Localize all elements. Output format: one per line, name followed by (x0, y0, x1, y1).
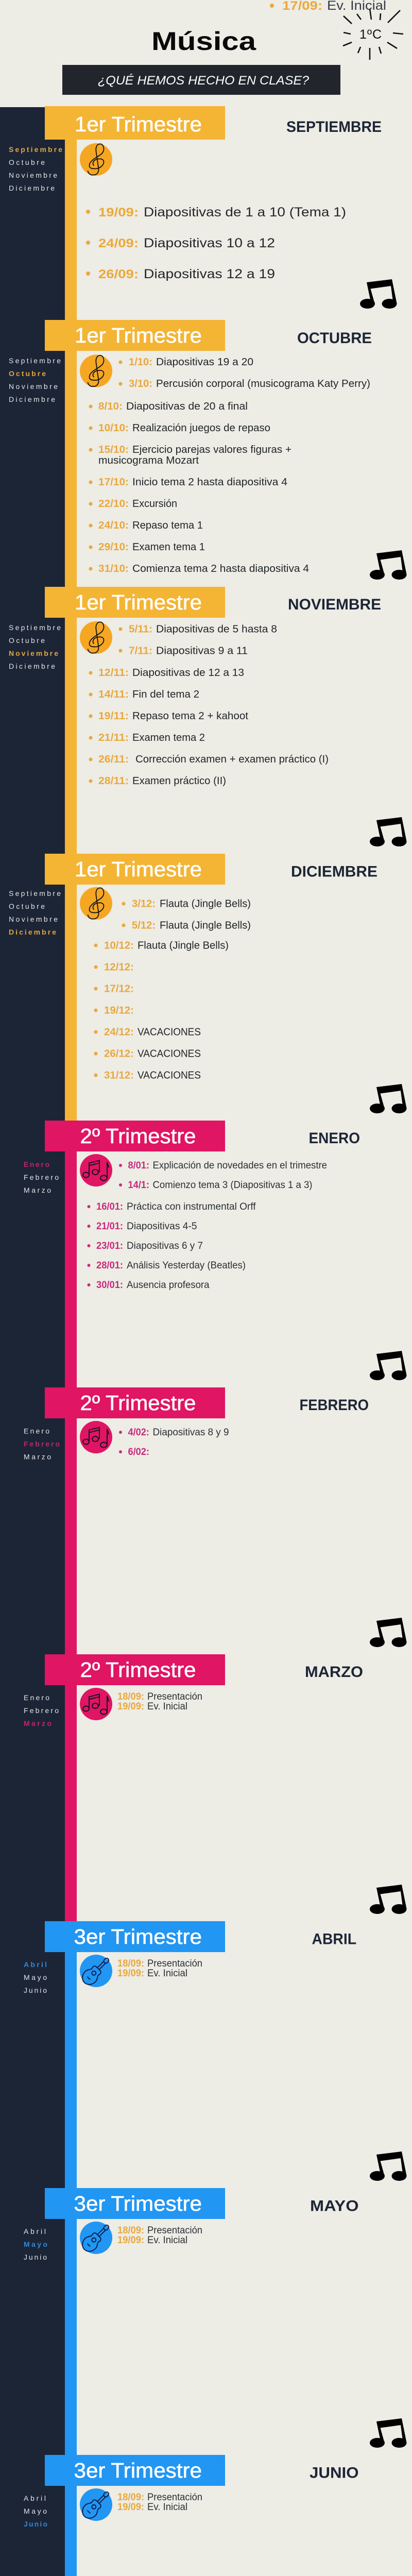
month navigation: Enero (24, 1160, 49, 1168)
term banner: 2º Trimestre (80, 1124, 196, 1148)
term banner: 3er Trimestre (74, 2459, 202, 2482)
item: 19/12: 19/12: (104, 1005, 134, 1016)
term banner (45, 2188, 225, 2219)
section: septiembre (9, 106, 397, 309)
item: 5/12: Flauta (Jingle Bells) (160, 920, 251, 931)
item: 15/10: Ejercicio parejas valores figuras + (132, 444, 291, 455)
item: 24/12: 24/12: (104, 1026, 134, 1038)
month navigation: Mayo (24, 2507, 47, 2515)
timeline rail: first term (65, 140, 77, 1121)
term banner: 1er Trimestre (75, 112, 202, 136)
item: 24/10: 24/10: (98, 520, 129, 531)
section: abril (24, 1921, 407, 2181)
item: 1/10: 1/10: (129, 357, 152, 368)
term banner: 1er Trimestre (75, 324, 202, 347)
entries: Ev. Inicial (147, 1968, 187, 1979)
term banner (45, 1921, 225, 1952)
item: 26/12 (94, 1048, 201, 1059)
entries (117, 1691, 202, 1712)
section: febrero (24, 1387, 407, 1647)
burst badge: 1ºC: 1ºC (359, 27, 382, 42)
entries: 18/09: (117, 1691, 144, 1702)
month heading: NOVIEMBRE (288, 596, 381, 613)
item: 1/10 (118, 357, 253, 368)
item: 22/10: 22/10: (98, 498, 129, 510)
icon: music note (370, 1885, 407, 1914)
cropped top item: 17/09 (270, 0, 386, 13)
item: 17/12: 17/12: (104, 983, 134, 994)
item: 14/11 (89, 689, 199, 700)
item: 12/11: Diapositivas de 12 a 13 (132, 667, 244, 679)
item: 28/01: Análisis Yesterday (Beatles) (127, 1260, 246, 1271)
item: 8/01: Explicación de novedades en el trimestre (152, 1160, 327, 1171)
item: 24/10 (89, 520, 203, 531)
icon: treble clef (80, 354, 112, 387)
month navigation: Octubre (9, 636, 45, 645)
icon: music note (370, 1618, 407, 1647)
term banner: 3er Trimestre (74, 1925, 202, 1948)
timeline rail: third term (65, 1921, 77, 2576)
item: 31/12: VACACIONES (138, 1070, 201, 1081)
item: 4/02: Diapositivas 8 y 9 (152, 1427, 229, 1438)
item: 22/10 (89, 498, 177, 510)
month navigation: Septiembre (9, 145, 62, 154)
icon: guitar (79, 2487, 113, 2521)
term banner (45, 1387, 225, 1418)
icon: music notes (80, 1154, 112, 1187)
entries: 19/09: (117, 2235, 144, 2246)
dark sidebar panel (0, 107, 65, 2576)
item: 29/10 (89, 541, 205, 553)
entries (117, 1958, 202, 1979)
month navigation: Septiembre (9, 623, 61, 632)
month heading: OCTUBRE (297, 330, 372, 347)
item: 31/12 (94, 1070, 201, 1081)
item: 12/12: 12/12: (104, 961, 134, 973)
icon: music note (370, 550, 407, 580)
month navigation: Junio (24, 2253, 47, 2261)
item: 12/11: 12/11: (98, 667, 129, 679)
item: 30/01: 30/01: (96, 1280, 123, 1291)
month heading: ENERO (309, 1130, 360, 1147)
item: 3/12: 3/12: (132, 899, 156, 910)
entries (117, 2492, 202, 2513)
item: 16/01: 16/01: (96, 1201, 123, 1212)
icon: treble clef (80, 143, 112, 176)
item: 21/01: 21/01: (96, 1221, 123, 1232)
entries: Presentación (147, 2225, 202, 2236)
month navigation: Septiembre (9, 357, 61, 365)
month navigation: Diciembre (9, 395, 55, 403)
icon: guitar (79, 1954, 113, 1988)
item: 19/11: 19/11: (98, 710, 129, 722)
item: 23/01 (88, 1241, 203, 1251)
item: 26/09 (86, 267, 275, 281)
item: 10/12 (94, 940, 229, 951)
item: 15/10: musicograma Mozart (98, 455, 199, 466)
entries: Ev. Inicial (147, 2502, 187, 2513)
entries: Presentación (147, 2492, 202, 2503)
month navigation (9, 889, 61, 936)
month navigation: Noviembre (9, 915, 58, 923)
icon: music note (370, 1351, 407, 1380)
item: 8/01: 8/01: (128, 1160, 149, 1171)
month navigation: Abril (24, 2494, 46, 2502)
month heading: MARZO (305, 1664, 363, 1681)
entries: 18/09: (117, 1958, 144, 1969)
item: 28/11: 28/11: (98, 775, 129, 787)
month navigation (24, 1693, 59, 1727)
month navigation: Noviembre (9, 171, 57, 179)
month navigation: Marzo (24, 1719, 52, 1727)
icon: music note (370, 2151, 407, 2181)
item: 10/12: Flauta (Jingle Bells) (138, 940, 229, 951)
item: 8/10: Diapositivas de 20 a final (126, 401, 248, 412)
subtitle bar (62, 65, 340, 95)
item: 22/10: Excursión (132, 498, 177, 510)
item: 31/10: 31/10: (98, 563, 129, 574)
month heading: ABRIL (312, 1931, 356, 1947)
month navigation: Diciembre (9, 184, 55, 192)
icon: music notes (80, 1421, 112, 1453)
item: 14/11: Fin del tema 2 (132, 689, 199, 700)
item: 24/12: VACACIONES (138, 1026, 201, 1038)
term banner (45, 1654, 225, 1685)
item: 7/11: Diapositivas 9 a 11 (156, 645, 248, 656)
item: 29/10: 29/10: (98, 541, 129, 553)
month navigation: Noviembre (9, 382, 58, 391)
item: 26/11: Corrección examen + examen práctico (I) (135, 754, 329, 765)
item: 10/10: 10/10: (98, 422, 129, 434)
term banner (45, 1121, 225, 1151)
item: 14/11: 14/11: (98, 689, 129, 700)
month navigation: Marzo (24, 1453, 51, 1461)
entries: Ev. Inicial (147, 2235, 187, 2246)
month navigation: Diciembre (9, 928, 56, 936)
month navigation: Octubre (9, 369, 46, 378)
month navigation: Marzo (24, 1186, 51, 1194)
item: 26/12: VACACIONES (138, 1048, 201, 1059)
item: 14/1: Comienzo tema 3 (Diapositivas 1 a 3) (152, 1180, 312, 1191)
item: 7/11: 7/11: (129, 645, 152, 656)
item: 21/11 (89, 732, 205, 743)
month navigation: Abril (24, 2227, 46, 2235)
month heading: JUNIO (310, 2465, 358, 2481)
item: 12/11 (89, 667, 244, 679)
month navigation: Noviembre (9, 649, 58, 657)
subtitle bar: ¿QUÉ HEMOS HECHO EN CLASE? (98, 74, 310, 88)
item: 30/01: Ausencia profesora (127, 1280, 210, 1291)
month heading: FEBRERO (300, 1397, 369, 1414)
timeline rail: second term (65, 1121, 77, 1921)
month navigation (24, 1427, 60, 1461)
icon: music note (370, 817, 407, 846)
item: 31/10: Comienza tema 2 hasta diapositiva 4 (132, 563, 309, 574)
month navigation (24, 1960, 47, 1994)
item: 31/12: 31/12: (104, 1070, 134, 1081)
month navigation (24, 1160, 59, 1194)
term banner: 2º Trimestre (80, 1391, 196, 1415)
item: 28/01: 28/01: (96, 1260, 123, 1271)
item: 1/10: Diapositivas 19 a 20 (156, 357, 253, 368)
item: 3/10: 3/10: (129, 378, 152, 389)
item: 3/10: Percusión corporal (musicograma Katy Perry) (156, 378, 370, 389)
item: 24/09: Diapositivas 10 a 12 (144, 236, 275, 250)
item: 6/02: 6/02: (128, 1447, 149, 1458)
item: 28/11: Examen práctico (II) (132, 775, 226, 787)
item: 19/09: Diapositivas de 1 a 10 (Tema 1) (144, 205, 346, 219)
item: 5/11: 5/11: (129, 623, 152, 635)
item: 24/09 (86, 236, 275, 250)
month navigation: Enero (24, 1427, 49, 1435)
entries: 18/09: (117, 2492, 144, 2503)
term banner (45, 106, 225, 140)
icon: treble clef (80, 887, 112, 920)
entries: Presentación (147, 1691, 202, 1702)
term banner (45, 320, 225, 351)
item: 16/01: Práctica con instrumental Orff (127, 1201, 256, 1212)
item: 29/10: Examen tema 1 (132, 541, 205, 553)
entries: 19/09: (117, 2502, 144, 2513)
item: 23/01: Diapositivas 6 y 7 (127, 1241, 203, 1251)
section: enero (24, 1121, 407, 1380)
term banner: 2º Trimestre (80, 1658, 196, 1682)
term banner: 1er Trimestre (75, 857, 202, 881)
item: 17/10: Inicio tema 2 hasta diapositiva 4 (132, 477, 287, 488)
item: 15/10 (89, 444, 291, 466)
month heading: SEPTIEMBRE (286, 118, 382, 135)
month navigation (9, 623, 61, 670)
item: 6/02 (119, 1447, 149, 1458)
icon: music note (370, 1084, 407, 1113)
item: 3/12: Flauta (Jingle Bells) (160, 899, 251, 910)
entries: 19/09: (117, 1968, 144, 1979)
entries: 19/09: (117, 1701, 144, 1712)
item: 7/11 (118, 645, 248, 656)
item: 21/11: 21/11: (98, 732, 129, 743)
item: 8/10: 8/10: (98, 401, 123, 412)
icon: guitar (79, 2221, 113, 2255)
term banner (45, 587, 225, 618)
section: junio (24, 2455, 407, 2576)
term banner: 1er Trimestre (75, 590, 202, 614)
item: 24/09: 24/09: (98, 236, 139, 250)
section: mayo (24, 2188, 407, 2448)
title: Música (151, 27, 256, 56)
item: 15/10: 15/10: (98, 444, 129, 455)
month navigation: Octubre (9, 158, 45, 166)
month navigation: Junio (24, 2520, 47, 2528)
month navigation: Diciembre (9, 662, 55, 670)
entries: Ev. Inicial (147, 1701, 187, 1712)
month navigation (9, 357, 61, 403)
item: 5/11: Diapositivas de 5 hasta 8 (156, 623, 277, 635)
entries (117, 2225, 202, 2246)
item: 24/10: Repaso tema 1 (132, 520, 203, 531)
month navigation: Abril (24, 1960, 47, 1969)
icon: music notes (80, 1688, 112, 1720)
item: 28/11 (89, 775, 226, 787)
section: octubre (9, 320, 407, 580)
item: 21/11: Examen tema 2 (132, 732, 205, 743)
item: 23/01: 23/01: (96, 1241, 123, 1251)
icon: music note (370, 2418, 407, 2448)
month navigation: Septiembre (9, 889, 61, 897)
entries: Presentación (147, 1958, 202, 1969)
month navigation: Mayo (24, 2240, 47, 2248)
item: 26/09: 26/09: (98, 267, 139, 281)
item: 10/10: Realización juegos de repaso (132, 422, 270, 434)
item: 21/01 (88, 1221, 197, 1232)
item: 19/09: 19/09: (98, 206, 139, 219)
section: marzo (24, 1654, 407, 1914)
item: 4/02 (119, 1427, 229, 1438)
icon: treble clef (80, 621, 112, 654)
item: 26/11: 26/11: (98, 754, 129, 765)
term banner: 3er Trimestre (74, 2192, 202, 2215)
term banner (45, 854, 225, 885)
burst badge: 1ºC (343, 9, 403, 60)
item: 19/09 (86, 205, 346, 219)
term banner (45, 2455, 225, 2486)
month navigation: Junio (24, 1986, 47, 1994)
section: noviembre (9, 587, 407, 846)
icon: music note (360, 279, 397, 309)
section: diciembre (9, 854, 407, 1113)
month navigation: Enero (24, 1693, 49, 1702)
month navigation: Mayo (24, 1973, 47, 1981)
item: 17/10: 17/10: (98, 477, 129, 488)
month navigation: Octubre (9, 902, 45, 910)
item: 10/12: 10/12: (104, 940, 134, 951)
month heading: DICIEMBRE (291, 863, 377, 880)
item: 19/11: Repaso tema 2 + kahoot (132, 710, 248, 722)
month heading: MAYO (310, 2198, 358, 2214)
entries: 18/09: (117, 2225, 144, 2236)
item: 26/12: 26/12: (104, 1048, 134, 1059)
month navigation (24, 2494, 47, 2528)
item: 24/12 (94, 1026, 201, 1038)
item: 30/01 (88, 1280, 210, 1291)
month navigation: Febrero (24, 1439, 60, 1448)
month navigation (24, 2227, 47, 2261)
item: 26/09: Diapositivas 12 a 19 (144, 267, 275, 281)
month navigation (9, 145, 62, 192)
month navigation: Febrero (24, 1706, 59, 1715)
item: 21/01: Diapositivas 4-5 (127, 1221, 197, 1232)
month navigation: Febrero (24, 1173, 59, 1181)
item: 4/02: 4/02: (128, 1427, 149, 1438)
item: 5/12: 5/12: (132, 920, 156, 931)
item: 14/1: 14/1: (128, 1180, 149, 1191)
